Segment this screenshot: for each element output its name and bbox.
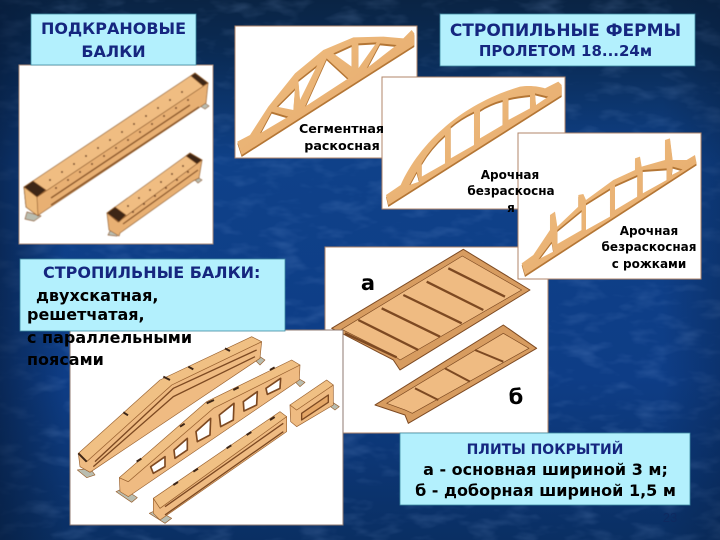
page number: 23 — [663, 510, 677, 525]
label: arched truss: я — [507, 201, 515, 215]
illustration: gable beam — [77, 337, 265, 478]
panel: segment truss — [235, 26, 417, 158]
label: arched truss: Арочная — [481, 168, 539, 182]
label: segment truss: Сегментная — [299, 121, 384, 136]
heading box: roof trusses — [440, 14, 695, 66]
panel: arched truss with horns — [518, 133, 701, 279]
text box: roof slabs: а - основная шириной 3 м; — [423, 460, 668, 479]
text box: roof beams: поясами — [27, 350, 104, 369]
text box: roof beams — [20, 259, 285, 369]
text box: roof slabs — [400, 433, 690, 505]
label: arched truss: безраскосна — [467, 184, 555, 198]
illustration: horned truss — [522, 138, 697, 277]
illustration: parallel chord beam — [149, 412, 287, 523]
heading box: roof trusses: ПРОЛЕТОМ 18...24м — [479, 42, 652, 60]
label: horned truss: Арочная — [620, 224, 678, 238]
label: segment truss: раскосная — [304, 138, 380, 153]
illustration: beam with openings — [116, 360, 305, 502]
text box: roof beams: двухскатная, — [36, 286, 158, 305]
panel: crane beams picture — [19, 65, 213, 244]
label: horned truss: безраскосная — [602, 240, 696, 254]
heading box: crane beams: БАЛКИ — [81, 42, 146, 61]
heading box: roof trusses: СТРОПИЛЬНЫЕ ФЕРМЫ — [450, 21, 681, 41]
label: b: б — [509, 385, 523, 409]
illustration: slab b — [375, 325, 537, 423]
illustration: short beam — [290, 380, 339, 427]
label: horned truss: с рожками — [612, 257, 686, 271]
text box: roof slabs: ПЛИТЫ ПОКРЫТИЙ — [467, 441, 623, 458]
heading box: crane beams — [31, 14, 196, 65]
text box: roof beams: СТРОПИЛЬНЫЕ БАЛКИ: — [43, 263, 260, 282]
panel: roof beams picture — [70, 330, 343, 525]
panel: arched truss — [382, 77, 565, 209]
illustration: arched truss — [386, 82, 562, 207]
panel: roof slabs — [325, 247, 548, 433]
text box: roof beams: с параллельными — [27, 328, 192, 347]
illustration: segment truss — [237, 30, 414, 157]
illustration: long crane beam — [24, 73, 209, 221]
illustration: slab a — [332, 249, 530, 370]
text box: roof slabs: б - доборная шириной 1,5 м — [415, 481, 676, 500]
text box: roof beams: решетчатая, — [27, 305, 145, 324]
heading box: crane beams: ПОДКРАНОВЫЕ — [41, 19, 186, 38]
illustration: short crane beam — [107, 153, 202, 236]
label: a: а — [361, 271, 375, 295]
